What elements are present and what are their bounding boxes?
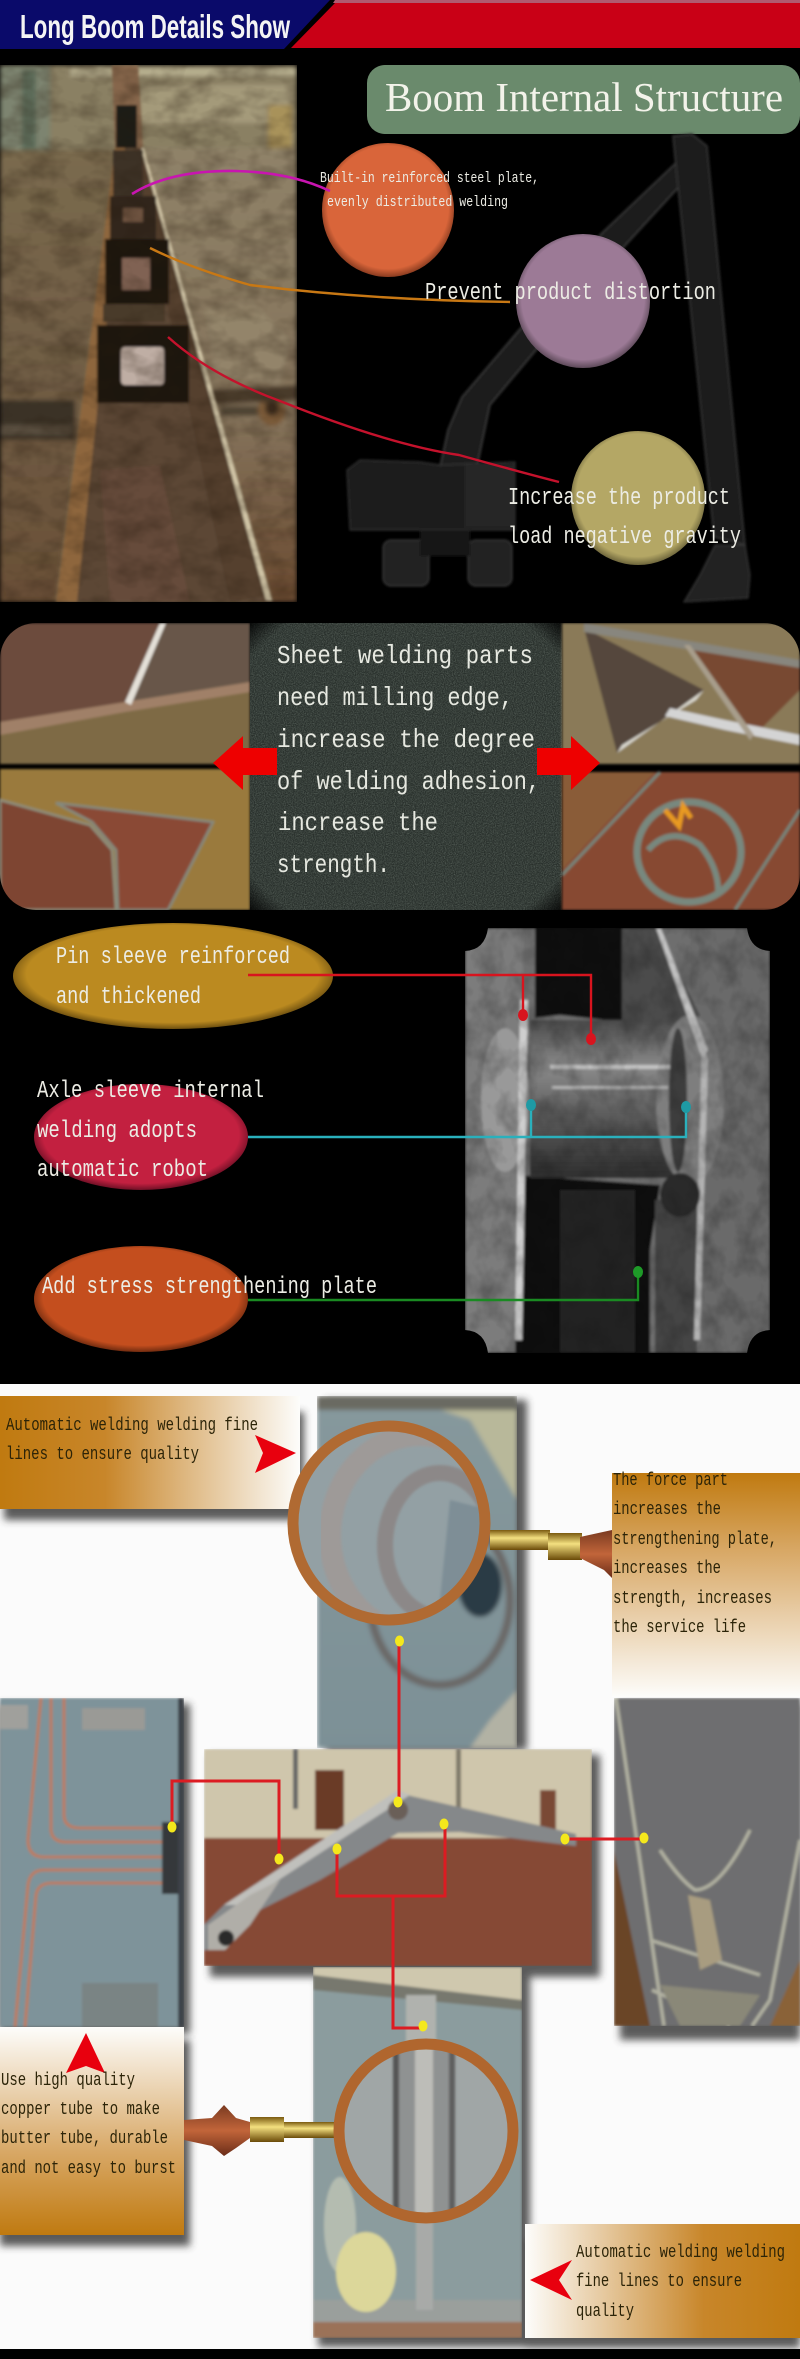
box: automatic welding top xyxy=(0,1396,300,1509)
photo: open boom interior xyxy=(0,65,297,602)
text block: sheet welding parts: strength. xyxy=(277,850,390,880)
curve: magenta leader xyxy=(132,171,330,194)
excavator undercarriage xyxy=(420,530,470,556)
text: automatic welding top: lines to ensure quality xyxy=(6,1445,199,1465)
panel: milling edge photos xyxy=(0,623,800,910)
label: axle sleeve internal: automatic robot xyxy=(37,1157,208,1184)
excavator silhouette xyxy=(347,134,750,602)
magnifier handle top xyxy=(490,1530,612,1578)
curve: orange leader xyxy=(150,248,510,302)
label: built-in reinforced plate: evenly distributed welding xyxy=(327,194,508,211)
text block: sheet welding parts: Sheet welding parts xyxy=(277,641,533,671)
magnifier handle bottom xyxy=(184,2105,334,2156)
text: copper tube: butter tube, durable xyxy=(1,2129,168,2149)
arrow: red left xyxy=(213,736,277,790)
title: Long Boom Details Show xyxy=(20,8,290,45)
label: pin sleeve reinforced: Pin sleeve reinforced xyxy=(56,944,290,971)
text: copper tube xyxy=(1,2071,176,2179)
connectors: yellow dots xyxy=(168,1636,648,2032)
excavator stick xyxy=(673,134,745,545)
text: copper tube: and not easy to burst xyxy=(1,2159,176,2179)
header banner xyxy=(0,0,800,49)
arrow: red up pointer xyxy=(66,2033,105,2073)
text block: sheet welding parts: increase the xyxy=(278,808,438,838)
text: force part xyxy=(613,1471,777,1638)
label: built-in reinforced plate xyxy=(320,170,539,211)
callout ellipse: axle sleeve xyxy=(34,1078,264,1190)
photo: top left plate xyxy=(0,623,250,764)
footer bar xyxy=(0,2349,800,2359)
label: increase product load: Increase the product xyxy=(508,485,730,512)
heading pill: Boom Internal Structure: Boom Internal Structure xyxy=(385,74,783,120)
photo: copper tube plate xyxy=(0,1698,184,2027)
leader: green lines xyxy=(248,1266,643,1300)
text: force part: the service life xyxy=(613,1618,746,1638)
photo: long boom on red floor xyxy=(204,1749,592,1966)
photo: top right plate xyxy=(562,623,800,764)
panel: textured text background xyxy=(250,623,562,910)
leader: red pin lines xyxy=(248,975,596,1045)
photo: bottom weld xyxy=(313,1967,522,2338)
label: axle sleeve internal: Axle sleeve internal xyxy=(37,1078,264,1105)
photo: bottom right plate xyxy=(562,772,800,910)
text: force part: increases the xyxy=(613,1559,721,1579)
callout ellipse: stress plate xyxy=(34,1246,377,1352)
callout circle: distortion xyxy=(516,234,650,368)
text: copper tube: Use high quality xyxy=(1,2071,135,2091)
text: automatic welding bottom: fine lines to ensure xyxy=(576,2272,742,2292)
box: force part xyxy=(612,1473,800,1697)
label: pin sleeve reinforced xyxy=(56,944,290,1011)
label: pin sleeve reinforced: and thickened xyxy=(56,984,201,1011)
label: stress strengthening plate: Add stress strengthening plate xyxy=(42,1274,377,1301)
photo: right weld panel xyxy=(614,1698,800,2026)
box: automatic welding bottom xyxy=(525,2224,800,2338)
photo: bottom left plate xyxy=(0,769,250,910)
excavator cab highlight xyxy=(465,465,513,527)
shadows for detail panel xyxy=(0,1400,800,2348)
text: force part: increases the xyxy=(613,1500,721,1520)
callout ellipse: pin sleeve xyxy=(13,923,333,1029)
text: force part: The force part xyxy=(613,1471,728,1491)
magnifier ring top xyxy=(293,1426,510,1635)
box: copper tube xyxy=(0,2027,184,2235)
text: automatic welding bottom: quality xyxy=(576,2302,634,2322)
label: prevent product distortion: Prevent product distortion xyxy=(425,280,716,307)
curve: red leader xyxy=(168,337,559,482)
text block: sheet welding parts xyxy=(277,641,540,880)
excavator right track xyxy=(468,540,512,586)
label: axle sleeve internal: welding adopts xyxy=(37,1118,197,1145)
callout circle: built-in plate xyxy=(322,143,454,277)
photo: grayscale pin sleeve xyxy=(465,928,770,1353)
text block: sheet welding parts: of welding adhesion, xyxy=(277,767,540,797)
heading pill: Boom Internal Structure xyxy=(367,65,800,134)
arrow: red right xyxy=(537,736,600,790)
arrow: red left pointer xyxy=(530,2260,572,2300)
text: automatic welding top xyxy=(6,1416,258,1465)
label: axle sleeve internal xyxy=(37,1078,264,1184)
excavator left track xyxy=(383,540,429,586)
panel: white detail section xyxy=(0,1384,800,2349)
text block: sheet welding parts: need milling edge, xyxy=(277,683,513,713)
text: automatic welding top: Automatic welding welding fine xyxy=(6,1416,258,1436)
text: copper tube: copper tube to make xyxy=(1,2100,160,2120)
arrow: red right pointer xyxy=(255,1435,296,1473)
excavator cab and engine xyxy=(347,460,515,530)
callout circle: load xyxy=(571,431,705,565)
text: automatic welding bottom xyxy=(576,2243,785,2322)
text block: sheet welding parts: increase the degree xyxy=(277,725,535,755)
connectors: red lines xyxy=(172,1641,644,2028)
excavator bucket xyxy=(684,545,750,602)
label: increase product load xyxy=(508,485,741,551)
magnifier ring bottom xyxy=(339,2040,513,2225)
excavator boom xyxy=(435,160,690,500)
label: built-in reinforced plate: Built-in reinforced steel plate, xyxy=(320,170,539,187)
photo: top weld xyxy=(317,1396,517,1748)
leader: teal lines xyxy=(248,1099,691,1137)
